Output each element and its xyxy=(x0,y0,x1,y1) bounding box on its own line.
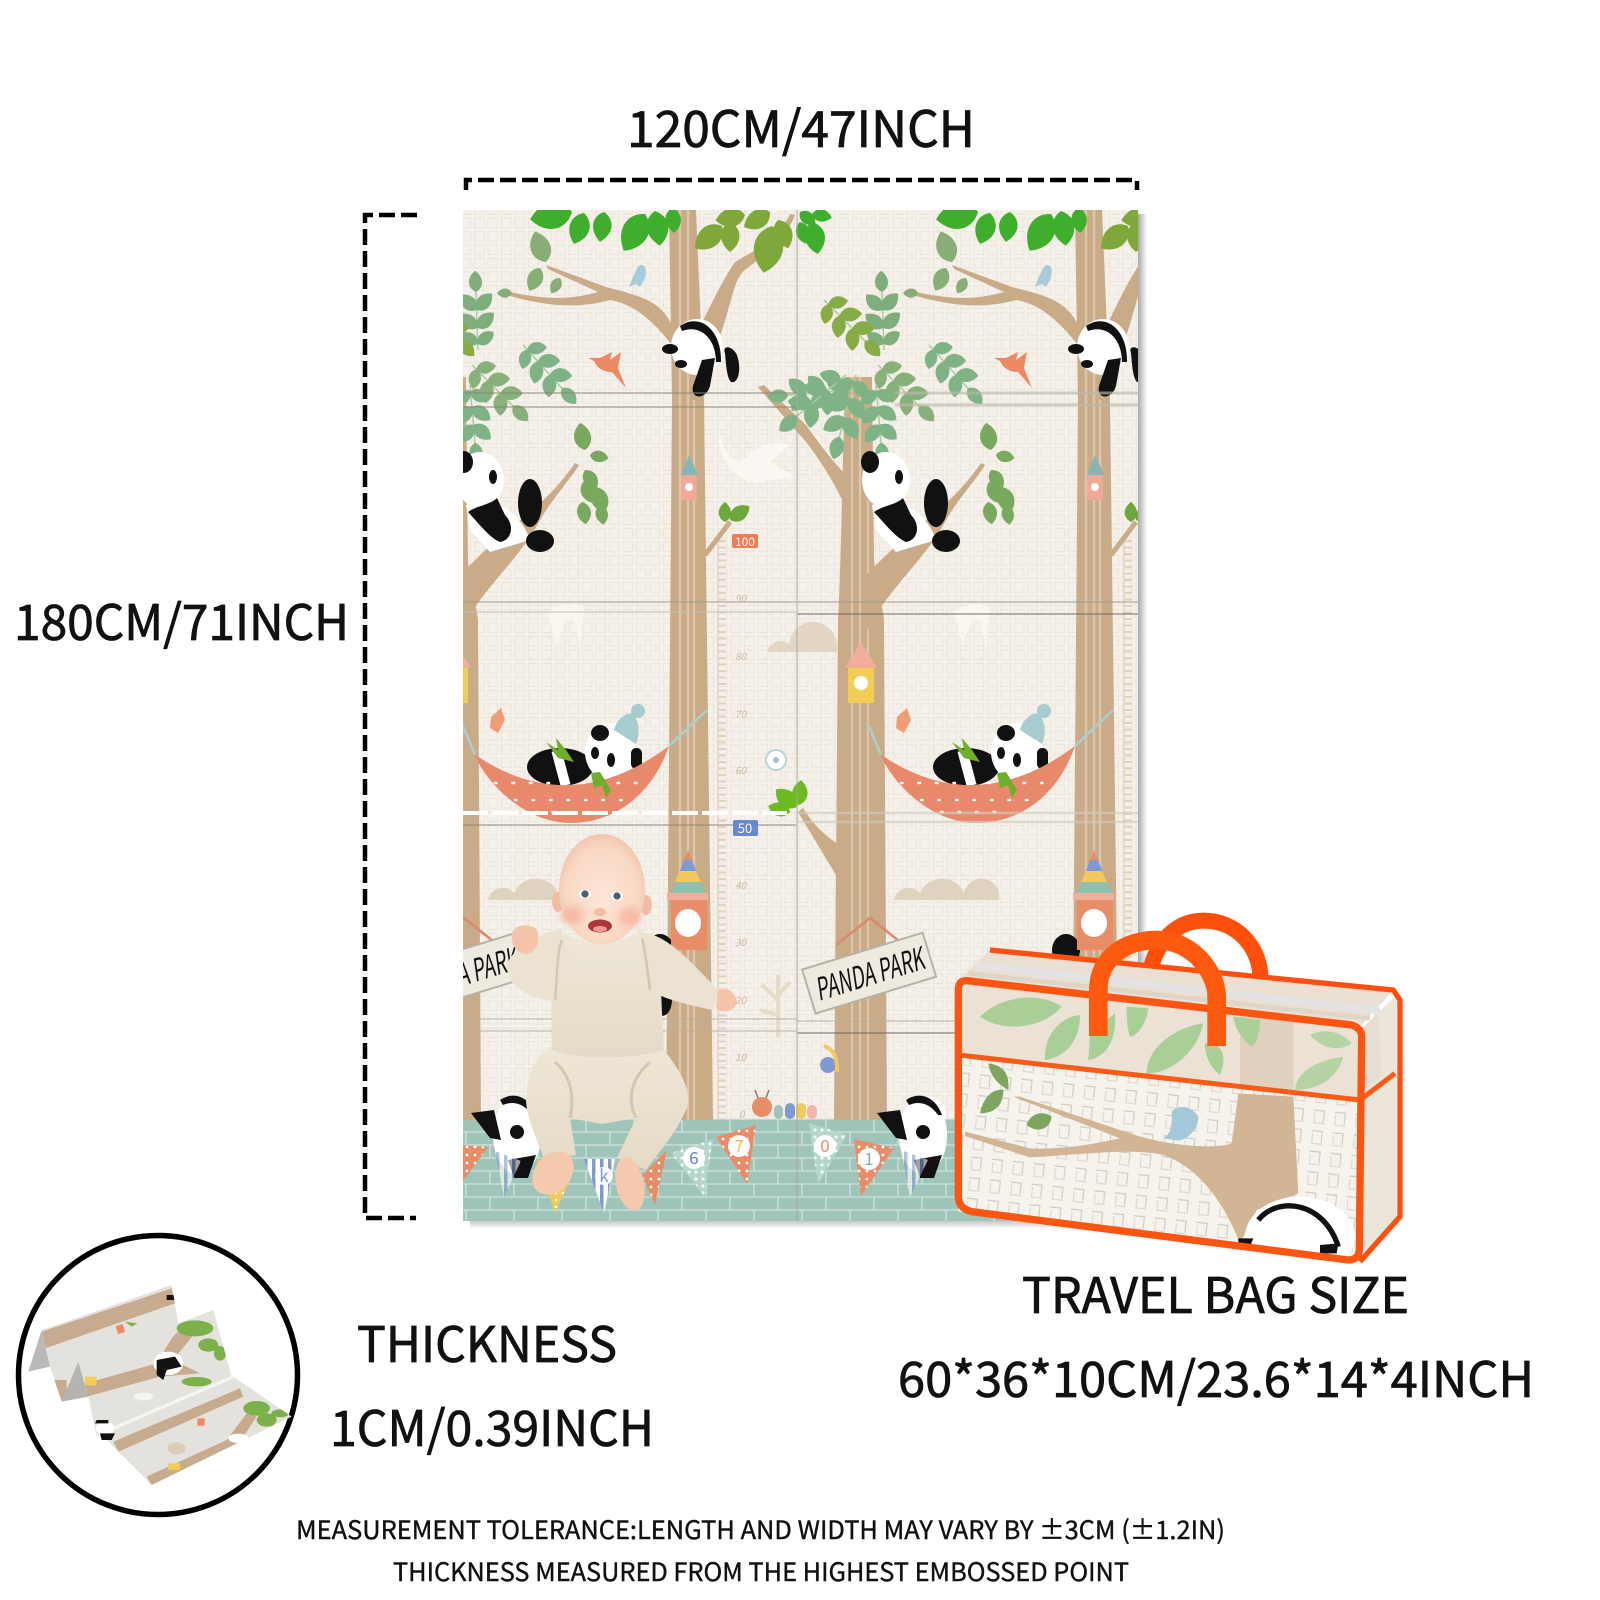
ruler numbers xyxy=(735,590,748,1121)
flag numerals: 1 xyxy=(864,1145,874,1170)
flag numerals: k xyxy=(599,1162,609,1187)
upper cloud xyxy=(767,622,837,652)
back rim xyxy=(990,950,1400,1262)
baby shirt xyxy=(552,930,664,1058)
tree on pocket xyxy=(965,1093,1298,1243)
panel three xyxy=(107,1377,292,1485)
snail xyxy=(820,1046,837,1073)
baby feet xyxy=(524,1143,649,1213)
back fold side xyxy=(28,1330,50,1372)
top face xyxy=(958,950,1393,1025)
mat base with embossed squares xyxy=(463,210,1138,1119)
pale tree sprout xyxy=(760,975,790,1037)
bird on pocket xyxy=(1163,1107,1198,1141)
travel bag heading: TRAVEL BAG SIZE xyxy=(1022,1257,1409,1328)
ruler numbers: 90 xyxy=(735,590,748,605)
thickness note: THICKNESS MEASURED FROM THE HIGHEST EMBOSSED POINT xyxy=(393,1552,1129,1589)
baby hands xyxy=(512,925,737,1011)
sign: panda park, left xyxy=(463,916,516,998)
brick wall band xyxy=(463,1119,1016,1221)
thickness heading: THICKNESS xyxy=(357,1306,617,1377)
ruler badge 100 xyxy=(732,534,758,548)
fold lines xyxy=(463,210,1138,1221)
panda on pocket xyxy=(1245,1196,1355,1256)
caterpillar xyxy=(752,1090,817,1119)
front handle xyxy=(1098,940,1217,1046)
white seam dashes xyxy=(462,811,787,815)
sign: panda park, right: PANDA PARK xyxy=(809,933,932,1010)
ruler numbers: 60 xyxy=(735,762,748,777)
baby arm right xyxy=(640,932,720,1010)
baby trousers xyxy=(526,1039,688,1170)
leaves on pocket xyxy=(980,1063,1052,1130)
ruler numbers: 40 xyxy=(735,877,748,892)
mat shadow xyxy=(470,214,1147,1229)
second fold side xyxy=(62,1362,88,1402)
side face xyxy=(1358,995,1397,1262)
shirt folds xyxy=(555,938,650,1000)
trouser folds xyxy=(555,1062,650,1118)
bunting flags xyxy=(463,1123,928,1213)
tolerance note: MEASUREMENT TOLERANCE:LENGTH AND WIDTH MAY VARY BY ±3CM (±1.2IN) xyxy=(296,1510,1225,1547)
ruler numbers: 70 xyxy=(735,706,748,721)
sign: panda park, left: PANDA PARK xyxy=(403,933,526,1010)
pattern repeat: right half xyxy=(758,210,1138,1178)
dimension label: width: 120CM/47INCH xyxy=(627,90,975,162)
back handle xyxy=(1152,921,1261,980)
flag numerals xyxy=(595,1132,880,1187)
ruler badge 50 xyxy=(733,820,758,836)
pattern repeat: left half xyxy=(463,210,832,1178)
flag numerals: 6 xyxy=(689,1144,699,1169)
ruler badge 100: 100 xyxy=(735,533,755,550)
sign: panda park, right xyxy=(801,916,938,1015)
ruler numbers: 0 xyxy=(739,1106,746,1121)
lower pocket xyxy=(958,1055,1360,1277)
ruler numbers: 30 xyxy=(735,934,748,949)
pocket divider xyxy=(958,1055,1395,1100)
travel bag value: 60*36*10CM/23.6*14*4INCH xyxy=(898,1341,1534,1412)
ruler numbers: 20 xyxy=(735,992,748,1007)
dimension line: length xyxy=(365,215,417,1218)
small panda on panel xyxy=(95,1420,115,1440)
flag numerals: 7 xyxy=(734,1132,744,1157)
mat sheets on top xyxy=(975,965,1382,1077)
ruler numbers: 80 xyxy=(735,648,748,663)
baby xyxy=(508,834,737,1213)
front frame xyxy=(958,981,1362,1260)
dimension label: length: 180CM/71INCH xyxy=(14,584,349,655)
baby head xyxy=(552,834,652,944)
white bird silhouette xyxy=(718,430,794,483)
ruler badge 50: 50 xyxy=(738,818,752,837)
folded mat thumbnail xyxy=(27,1283,297,1487)
thickness circle xyxy=(18,1236,298,1514)
panel two xyxy=(78,1310,232,1435)
ruler numbers: 10 xyxy=(735,1049,748,1064)
side sheets xyxy=(1363,1013,1382,1092)
baby arm left xyxy=(508,928,572,1000)
dimension line: width xyxy=(466,180,1137,190)
flag numerals: 0 xyxy=(820,1132,830,1157)
flower xyxy=(766,750,786,770)
travel bag xyxy=(958,921,1400,1277)
panel one xyxy=(42,1285,178,1402)
fold front edge xyxy=(97,1377,233,1437)
upper pocket xyxy=(958,980,1362,1103)
panel: play mat xyxy=(463,210,1138,1221)
thickness value: 1CM/0.39INCH xyxy=(330,1390,654,1461)
